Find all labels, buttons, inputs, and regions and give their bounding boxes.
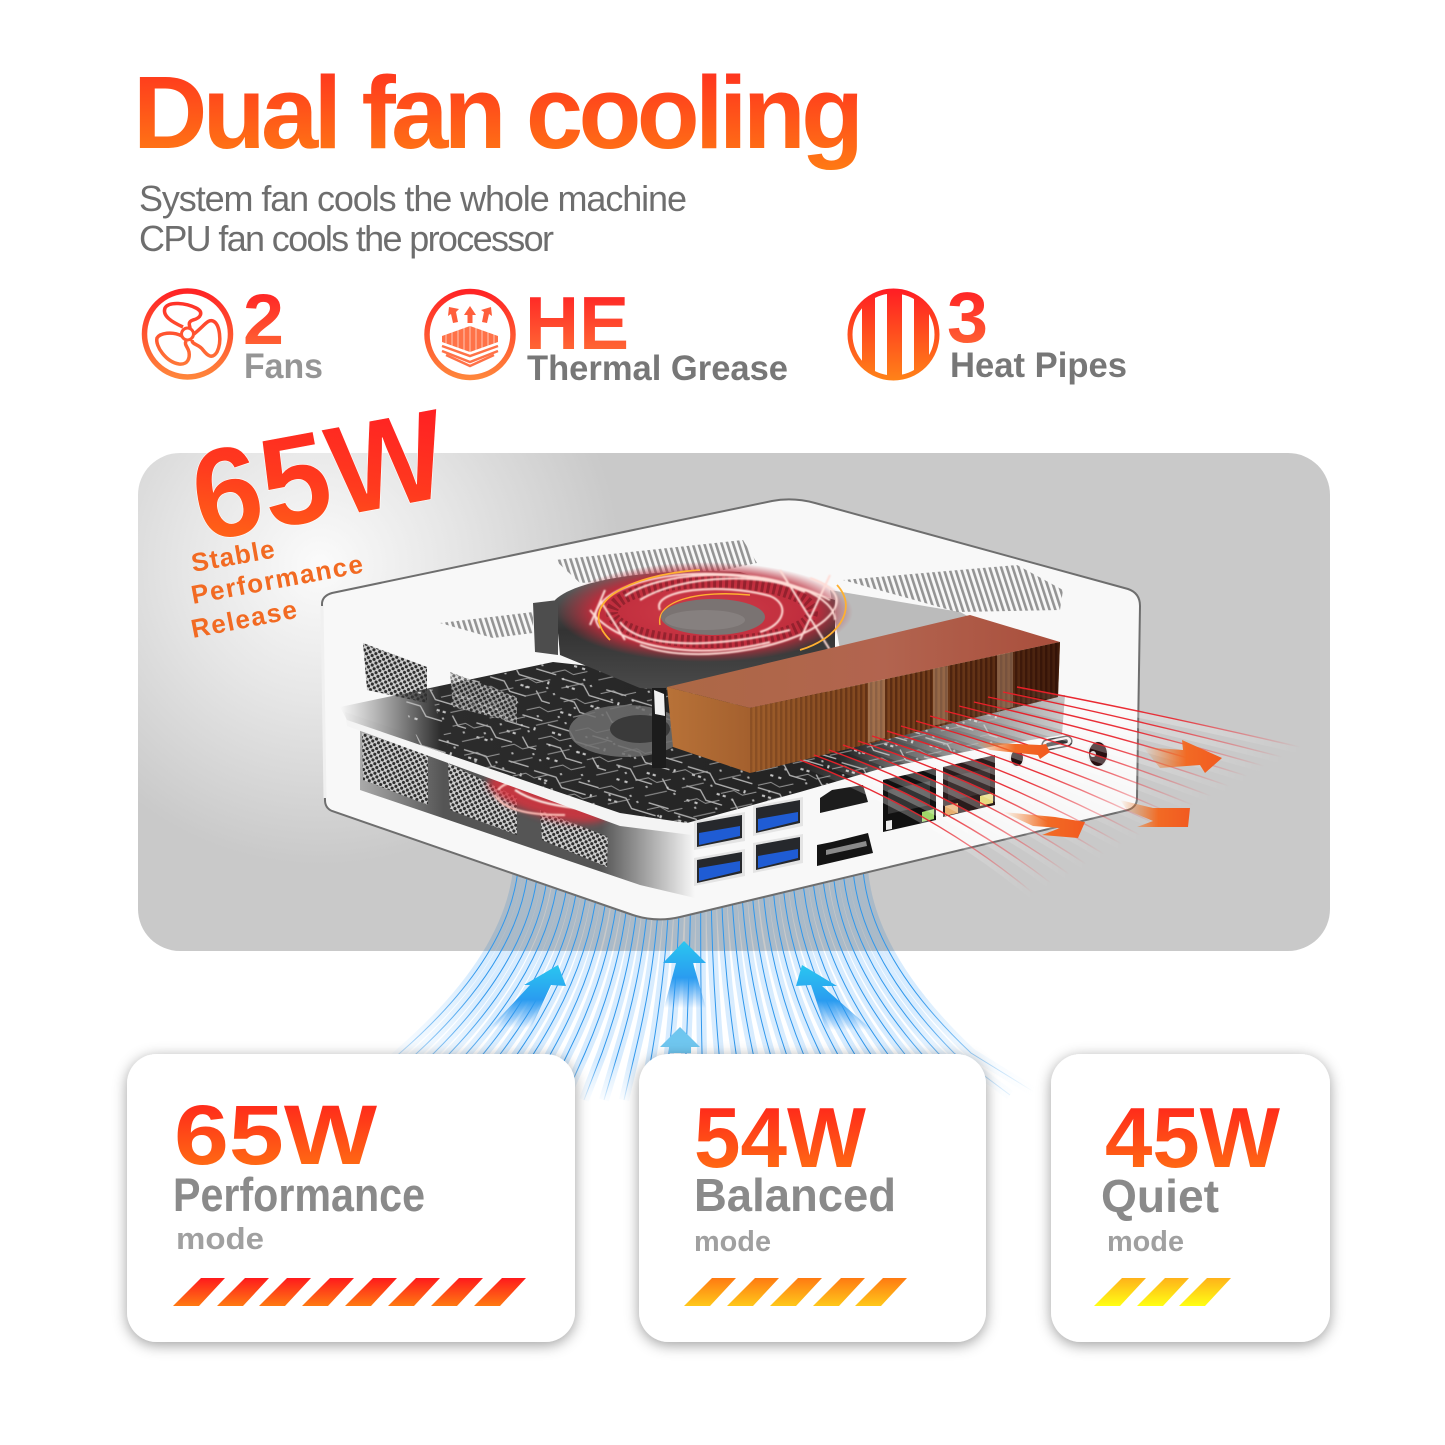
value: 54W: 54W [694,1091,867,1186]
arrow: intake centre [663,941,706,1008]
usb-c port [1041,735,1073,751]
vent: top left [440,612,533,638]
hdmi port [820,785,868,813]
stat: 2 fans [243,281,323,386]
mesh: lower 3 [540,810,608,867]
panel: balanced mode [639,1054,986,1342]
badge caption: stable performance release: Stable [189,534,277,578]
stat: 2 fans: 2 [243,281,284,360]
level bar: 5 orange stripes [684,1278,907,1306]
stat: 3 heat pipes: 3 [947,279,988,358]
mesh: lower 2 [448,763,517,835]
vent: top right [843,565,1063,612]
arrow: exhaust by usb-c [973,742,1050,759]
mesh: lower 1 [362,733,428,805]
system fan glow [483,763,613,833]
arrow: intake right [796,965,872,1030]
panel: performance mode [127,1054,575,1342]
case body [322,499,1140,919]
icon: fan [144,291,230,377]
arrow: exhaust lower right [1120,800,1190,827]
icon: heat pipes [850,288,937,382]
stat: 2 fans: Fans [244,347,323,386]
audio jack [1009,748,1025,768]
CPU fan red swirl [557,562,853,662]
subtitle text block: System fan cools the whole machine [139,178,687,219]
arrow: exhaust top right [1143,740,1222,773]
mesh: upper left [363,643,427,703]
lower bay: dark interior [360,728,695,898]
stat: 3 heat pipes: Heat Pipes [950,346,1127,385]
vent: top centre [555,540,757,583]
arrow: intake left [490,965,566,1028]
stat: HE thermal grease [525,281,788,388]
cooling fan hub under board [569,705,685,757]
arrow: exhaust lower middle [1003,812,1085,838]
shaded housing behind fan [830,590,975,650]
panel: quiet mode [1051,1054,1330,1342]
label: performance: Performance [173,1168,425,1221]
badge caption: stable performance release: Release [188,594,299,644]
label: mode: mode [694,1226,771,1258]
panel: product background [138,453,1330,951]
circuit board [340,662,1065,823]
chart: blue intake airflow lines [346,870,1047,1100]
subtitle text block: CPU fan cools the processor [139,218,554,259]
arrow: intake lower centre [660,1027,700,1053]
left edge highlight [322,606,325,798]
displayport [817,833,873,866]
label: balanced: Balanced [694,1169,896,1221]
chart: red exhaust airflow lines [800,687,1300,896]
label: quiet: Quiet [1101,1170,1219,1222]
fan bracket [533,600,558,655]
value: 45W: 45W [1105,1091,1281,1186]
badge: 65W: 65W [180,382,458,570]
CPU fan body [555,571,835,690]
icon: thermal grease [427,292,513,378]
value: 65W: 65W [174,1088,378,1182]
subtitle text block [139,178,687,259]
stat: 3 heat pipes [947,279,1127,385]
fan mount post [652,688,666,768]
level bar: 8 red stripes [173,1278,526,1306]
dc jack [1087,741,1109,767]
usb port bottom left [694,849,745,886]
level bar: 3 yellow stripes [1094,1278,1231,1306]
airflow fade between cards [570,1060,645,1106]
usb port top left [694,812,745,850]
usb port bottom right [753,834,803,873]
white divider plate [345,712,700,836]
title: Dual fan cooling [133,55,864,170]
stat: HE thermal grease: Thermal Grease [527,349,788,388]
ethernet port 2 [943,755,995,817]
badge caption: stable performance release: Performance [189,549,365,610]
mini PC illustration [322,499,1140,919]
heatsink [667,615,1060,773]
label: mode: mode [1107,1226,1184,1258]
usb port top right [753,797,803,836]
label: mode: mode [176,1221,264,1256]
ethernet port 1 [883,768,936,832]
mesh: upper second over board [450,672,517,723]
badge caption: stable performance release [188,534,365,644]
stat: HE thermal grease: HE [525,281,629,365]
